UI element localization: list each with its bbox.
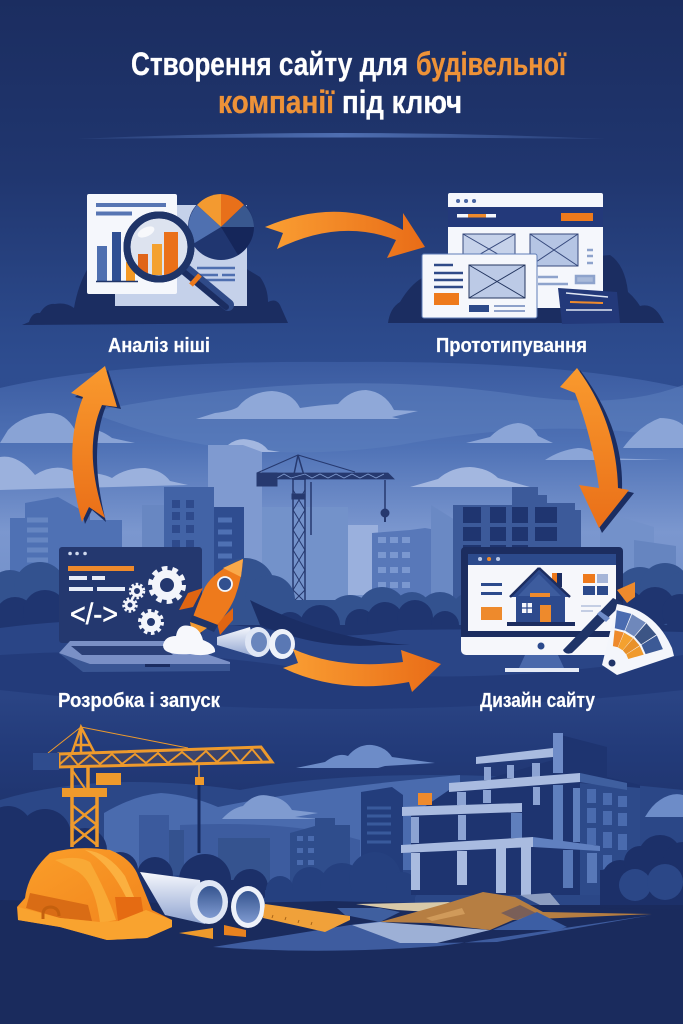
laptop dots — [70, 552, 85, 555]
wireframe images — [463, 234, 578, 266]
light ground patch — [213, 915, 652, 951]
bar chart — [96, 232, 138, 282]
cloud center small — [213, 439, 280, 452]
left layout blocks — [481, 584, 502, 594]
front tree line — [0, 587, 683, 645]
monitor frame — [461, 547, 623, 647]
title: під ключ — [342, 84, 462, 120]
right buildings — [372, 487, 581, 610]
monitor screen — [468, 565, 616, 631]
hill band — [104, 775, 460, 870]
trees left and centre — [0, 806, 268, 906]
hard hat — [17, 848, 172, 940]
front sheet — [87, 194, 177, 294]
left buildings — [10, 487, 244, 615]
back tree line — [0, 558, 683, 645]
trees centre — [265, 852, 418, 907]
label: analysis: Аналіз ніші — [108, 335, 210, 357]
rocket — [179, 559, 243, 638]
back sheet lines — [195, 268, 235, 280]
label: development: Розробка і запуск — [58, 690, 221, 712]
trees right — [600, 835, 683, 905]
code note — [558, 288, 620, 324]
label: design: Дизайн сайту — [480, 690, 596, 712]
browser dots — [458, 199, 474, 203]
browser window — [448, 193, 603, 308]
pipes small — [217, 627, 295, 659]
city buildings — [139, 787, 403, 890]
pie chart — [188, 194, 254, 260]
cloud right mid — [545, 448, 670, 460]
laptop base — [59, 641, 230, 670]
cloud top — [296, 745, 435, 768]
magnifier handle — [184, 270, 228, 307]
title — [131, 46, 567, 120]
panel: website design illustration — [461, 547, 674, 675]
card text lines — [434, 265, 463, 287]
sky band — [0, 362, 683, 645]
title: Створення сайту для — [131, 46, 408, 82]
arrow: launch to design — [283, 649, 441, 692]
panel: construction site scene — [0, 727, 683, 1024]
magnifier lens — [127, 215, 191, 279]
cloud left — [0, 413, 135, 443]
cloud mid — [222, 795, 320, 819]
browser nav band — [448, 207, 603, 227]
panel: development and launch illustration — [59, 547, 295, 672]
brush — [563, 582, 635, 654]
card image — [469, 265, 525, 298]
arrow: prototyping to design — [560, 368, 634, 533]
lower sky — [0, 775, 683, 905]
crane: city — [257, 455, 394, 602]
keyboard — [71, 646, 173, 655]
wireframe side lines — [538, 250, 594, 284]
panel: prototyping illustration — [388, 193, 664, 324]
sand pile — [380, 892, 652, 930]
front card — [422, 254, 537, 318]
cloud right upper — [466, 423, 553, 443]
colour fan — [602, 604, 674, 675]
monitor chin — [461, 637, 623, 655]
monitor header — [468, 554, 616, 565]
label: prototyping: Прототипування — [436, 335, 587, 357]
ground — [0, 900, 683, 1024]
arrow: analysis to prototyping — [265, 212, 425, 258]
code symbol: </-> — [70, 598, 118, 631]
gears — [124, 568, 184, 633]
cloud right — [645, 794, 683, 817]
blueprint rolls — [140, 872, 265, 928]
back sheet — [115, 205, 247, 306]
mound — [388, 255, 664, 323]
cloud far right — [623, 418, 683, 448]
monitor stand — [519, 655, 564, 668]
title: компанії — [218, 84, 335, 120]
panel: analysis illustration — [22, 194, 288, 325]
crane: orange — [33, 727, 272, 853]
trees right front — [619, 864, 683, 901]
colour swatches — [581, 574, 608, 611]
card buttons — [434, 293, 459, 305]
mound — [22, 268, 288, 325]
set squares — [179, 925, 246, 939]
cloud center — [196, 390, 418, 419]
building under construction — [401, 733, 640, 895]
far buildings — [208, 445, 676, 617]
house — [507, 568, 575, 626]
cloud lower right — [410, 467, 530, 487]
ground — [0, 620, 683, 709]
rocket smoke — [163, 625, 215, 655]
title: будівельної — [416, 46, 567, 82]
arrow: launch to analysis — [71, 366, 121, 524]
panel: sky and city scene — [0, 362, 683, 709]
cloud left lower — [0, 457, 188, 490]
ruler — [263, 904, 350, 932]
sky stripes — [90, 383, 683, 453]
sheet heading lines — [96, 205, 166, 214]
laptop screen — [59, 547, 202, 643]
code lines — [68, 566, 134, 571]
